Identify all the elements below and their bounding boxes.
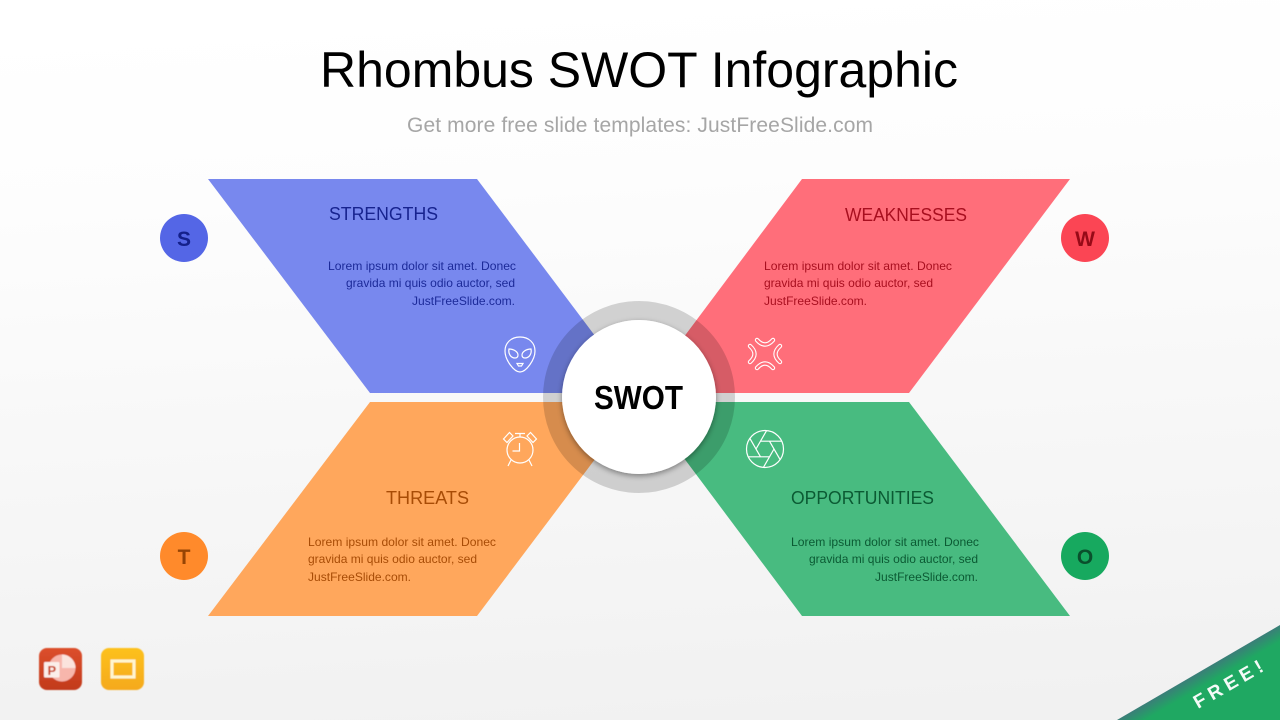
panel: weaknesses (642, 179, 1070, 393)
text block: threats: gravida mi quis odio auctor, sed (308, 552, 477, 566)
heading: strengths: STRENGTHS (329, 204, 438, 224)
badge: W: W (1075, 228, 1095, 251)
text block: weaknesses: JustFreeSlide.com. (764, 294, 867, 308)
text block: strengths: Lorem ipsum dolor sit amet. Donec (328, 259, 516, 273)
badge: S (160, 214, 208, 262)
icon: PowerPoint (39, 648, 82, 690)
center label: SWOT (594, 379, 683, 416)
ribbon label: FREE! (1190, 657, 1267, 713)
text block: threats (308, 535, 496, 584)
text block: strengths (328, 259, 516, 308)
icon: anger mark (750, 340, 780, 368)
text block: opportunities: gravida mi quis odio auctor, sed (809, 552, 978, 566)
icon: PowerPoint: P (47, 663, 56, 678)
badge: O (1061, 532, 1109, 580)
heading: opportunities: OPPORTUNITIES (791, 488, 934, 508)
text block: weaknesses (764, 259, 952, 308)
text block: weaknesses: gravida mi quis odio auctor, sed (764, 276, 933, 290)
text block: threats: Lorem ipsum dolor sit amet. Donec (308, 535, 496, 549)
panel: threats (208, 402, 638, 616)
center ring (552, 310, 726, 484)
text block: strengths: JustFreeSlide.com. (412, 294, 515, 308)
title: Rhombus SWOT Infographic (320, 42, 958, 98)
text block: weaknesses: Lorem ipsum dolor sit amet. Donec (764, 259, 952, 273)
text block: strengths: gravida mi quis odio auctor, sed (346, 276, 515, 290)
icon: alarm clock (504, 432, 536, 466)
text block: threats: JustFreeSlide.com. (308, 570, 411, 584)
badge: T (160, 532, 208, 580)
subtitle: Get more free slide templates: JustFreeSlide.com (407, 114, 873, 137)
ribbon: free (1117, 625, 1280, 720)
text block: opportunities (791, 535, 979, 584)
heading: weaknesses: WEAKNESSES (845, 205, 967, 225)
text block: opportunities: Lorem ipsum dolor sit amet. Donec (791, 535, 979, 549)
panel: opportunities (642, 402, 1070, 616)
badge: O: O (1077, 546, 1093, 569)
heading: threats: THREATS (386, 488, 469, 508)
icon: camera aperture (746, 430, 784, 468)
badge: T: T (178, 546, 191, 569)
panel: strengths (208, 179, 638, 393)
badge: W (1061, 214, 1109, 262)
icon: Google Slides (101, 648, 144, 690)
text block: opportunities: JustFreeSlide.com. (875, 570, 978, 584)
badge: S: S (177, 228, 191, 251)
icon: alien (505, 337, 535, 372)
center circle (562, 320, 716, 474)
